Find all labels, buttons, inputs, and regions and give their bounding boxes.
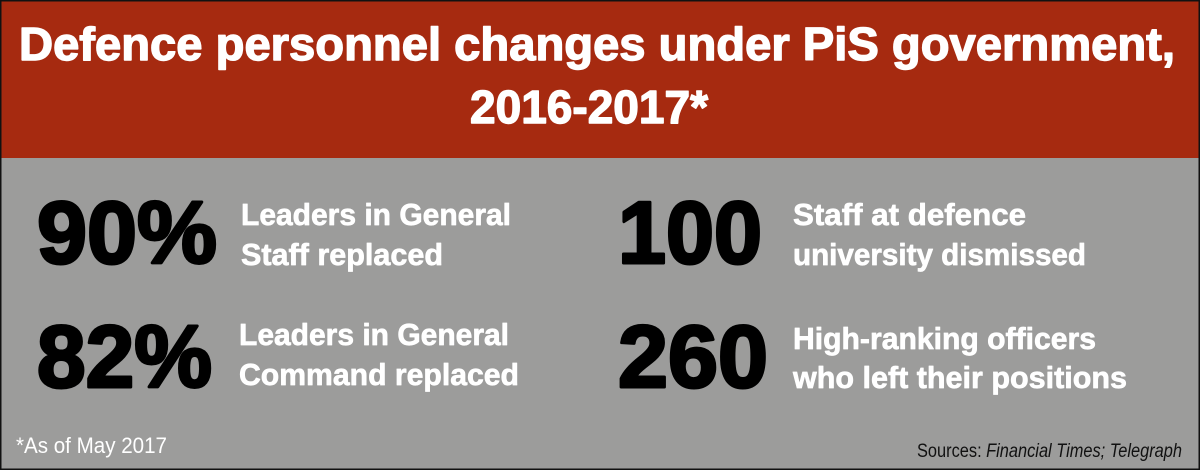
number: 90%: 90% (37, 183, 217, 282)
label: High-ranking officers who left their positions (792, 321, 1127, 395)
label: Leaders in General Staff replaced (241, 197, 511, 272)
label: Leaders in General Command replaced: Command replaced (239, 357, 519, 392)
label: Leaders in General Command replaced: Leaders in General (239, 317, 509, 352)
stat: 90% leaders in General Staff (37, 183, 511, 282)
number: 82%: 82% (37, 307, 212, 406)
stat: 100 staff at defence university (618, 183, 1086, 282)
label: High-ranking officers who left their positions: High-ranking officers (793, 321, 1096, 356)
stat: 260 high-ranking officers (618, 307, 1127, 406)
label: Staff at defence university dismissed: Staff at defence (793, 197, 1026, 232)
header band (0, 0, 1200, 158)
label: High-ranking officers who left their positions: who left their positions (792, 360, 1127, 395)
number: 100: 100 (618, 183, 762, 282)
stat: 82% leaders in General Command (37, 307, 519, 406)
footnote: *As of May 2017 (16, 433, 167, 458)
label: Leaders in General Staff replaced: Staff replaced (241, 237, 443, 272)
title (19, 18, 1175, 133)
label: Staff at defence university dismissed: university dismissed (793, 237, 1086, 272)
label: Leaders in General Staff replaced: Leaders in General (241, 197, 511, 232)
number: 260: 260 (618, 307, 768, 406)
title: Defence personnel changes under PiS government, (19, 18, 1175, 70)
label: Staff at defence university dismissed (793, 197, 1086, 272)
title: 2016-2017* (470, 81, 708, 133)
label: Leaders in General Command replaced (239, 317, 519, 392)
